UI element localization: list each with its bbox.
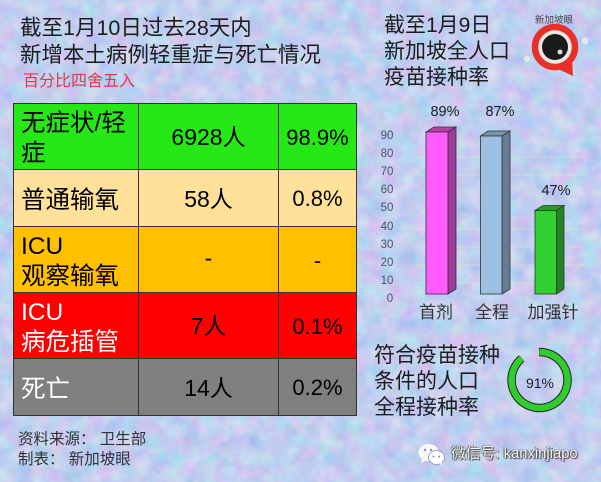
row: ICU observation: ICU [21, 233, 63, 260]
category labels: 加强针 [528, 303, 578, 322]
icon: WeChat [418, 444, 445, 466]
y axis labels: 30 [381, 239, 393, 251]
row: ICU observation: - [205, 244, 212, 270]
row: ICU intubated: ICU [21, 299, 63, 326]
y axis labels: 50 [381, 202, 393, 214]
bar: full course [480, 131, 510, 294]
source and credit: 资料来源： 卫生部 [18, 431, 146, 448]
y axis labels: 10 [381, 275, 393, 287]
value labels: 89% [430, 104, 460, 120]
bar: first dose [426, 127, 456, 294]
table: severity breakdown [13, 103, 357, 416]
row: ICU observation: 观察输氧 [21, 263, 119, 290]
donut chart: 91% [507, 348, 572, 412]
text: eligible population rate: 条件的人口 [374, 370, 479, 393]
bar: booster [535, 206, 564, 294]
row: ICU intubated: 0.1% [292, 314, 343, 338]
title: left heading: 新增本土病例轻重症与死亡情况 [20, 42, 321, 66]
row: deaths: 14人 [184, 374, 233, 400]
value labels: 47% [541, 183, 571, 199]
row: asymptomatic or mild: 6928人 [171, 124, 246, 150]
title: left heading: 截至1月10日过去28天内 [20, 16, 252, 40]
title: left heading [20, 16, 321, 66]
icon: logo: 新加坡眼 [535, 14, 573, 26]
watermark: WeChat id [418, 444, 578, 466]
row: ICU intubated: 病危插管 [21, 329, 119, 356]
title: right heading [384, 14, 510, 89]
category labels: 首剂 [419, 303, 453, 322]
title: right heading: 截至1月9日 [384, 14, 491, 37]
y axis labels: 40 [381, 221, 393, 233]
note: rounding: 百分比四舍五入 [23, 73, 135, 90]
row: ICU observation [13, 227, 357, 292]
watermark text: 微信号: kanxinjiapo [451, 446, 578, 462]
category labels [419, 303, 578, 322]
row: oxygen: 普通输氧 [21, 186, 119, 214]
row: asymptomatic or mild: 无症状/轻症 [21, 110, 126, 167]
category labels: 全程 [475, 303, 509, 322]
y axis labels: 70 [381, 166, 393, 178]
title: right heading: 疫苗接种率 [384, 66, 489, 89]
y axis labels: 90 [381, 130, 393, 142]
value labels: 87% [485, 104, 515, 120]
row: ICU intubated [13, 293, 357, 358]
y axis labels: 20 [381, 257, 393, 269]
row: deaths [13, 359, 357, 416]
y axis labels [381, 130, 393, 305]
text: eligible population rate [374, 344, 500, 419]
row: deaths: 死亡 [21, 376, 70, 402]
row: oxygen: 58人 [184, 186, 233, 212]
row: oxygen [13, 170, 357, 226]
text: eligible population rate: 符合疫苗接种 [374, 344, 500, 367]
icon: logo [524, 14, 588, 76]
bar chart: vaccination rates [380, 104, 585, 322]
row: asymptomatic or mild [13, 103, 357, 169]
source and credit [18, 430, 146, 468]
value labels [430, 104, 571, 199]
row: asymptomatic or mild: 98.9% [286, 124, 349, 150]
row: deaths: 0.2% [292, 375, 343, 400]
donut chart: 91%: 91% [526, 375, 554, 391]
title: right heading: 新加坡全人口 [384, 40, 510, 63]
y axis labels: 0 [387, 293, 393, 305]
row: oxygen: 0.8% [292, 186, 343, 211]
y axis labels: 80 [381, 148, 393, 160]
row: ICU observation: - [314, 248, 321, 272]
y axis labels: 60 [381, 184, 393, 196]
row: ICU intubated: 7人 [191, 313, 226, 339]
source and credit: 制表： 新加坡眼 [18, 450, 131, 468]
text: eligible population rate: 全程接种率 [374, 396, 479, 419]
